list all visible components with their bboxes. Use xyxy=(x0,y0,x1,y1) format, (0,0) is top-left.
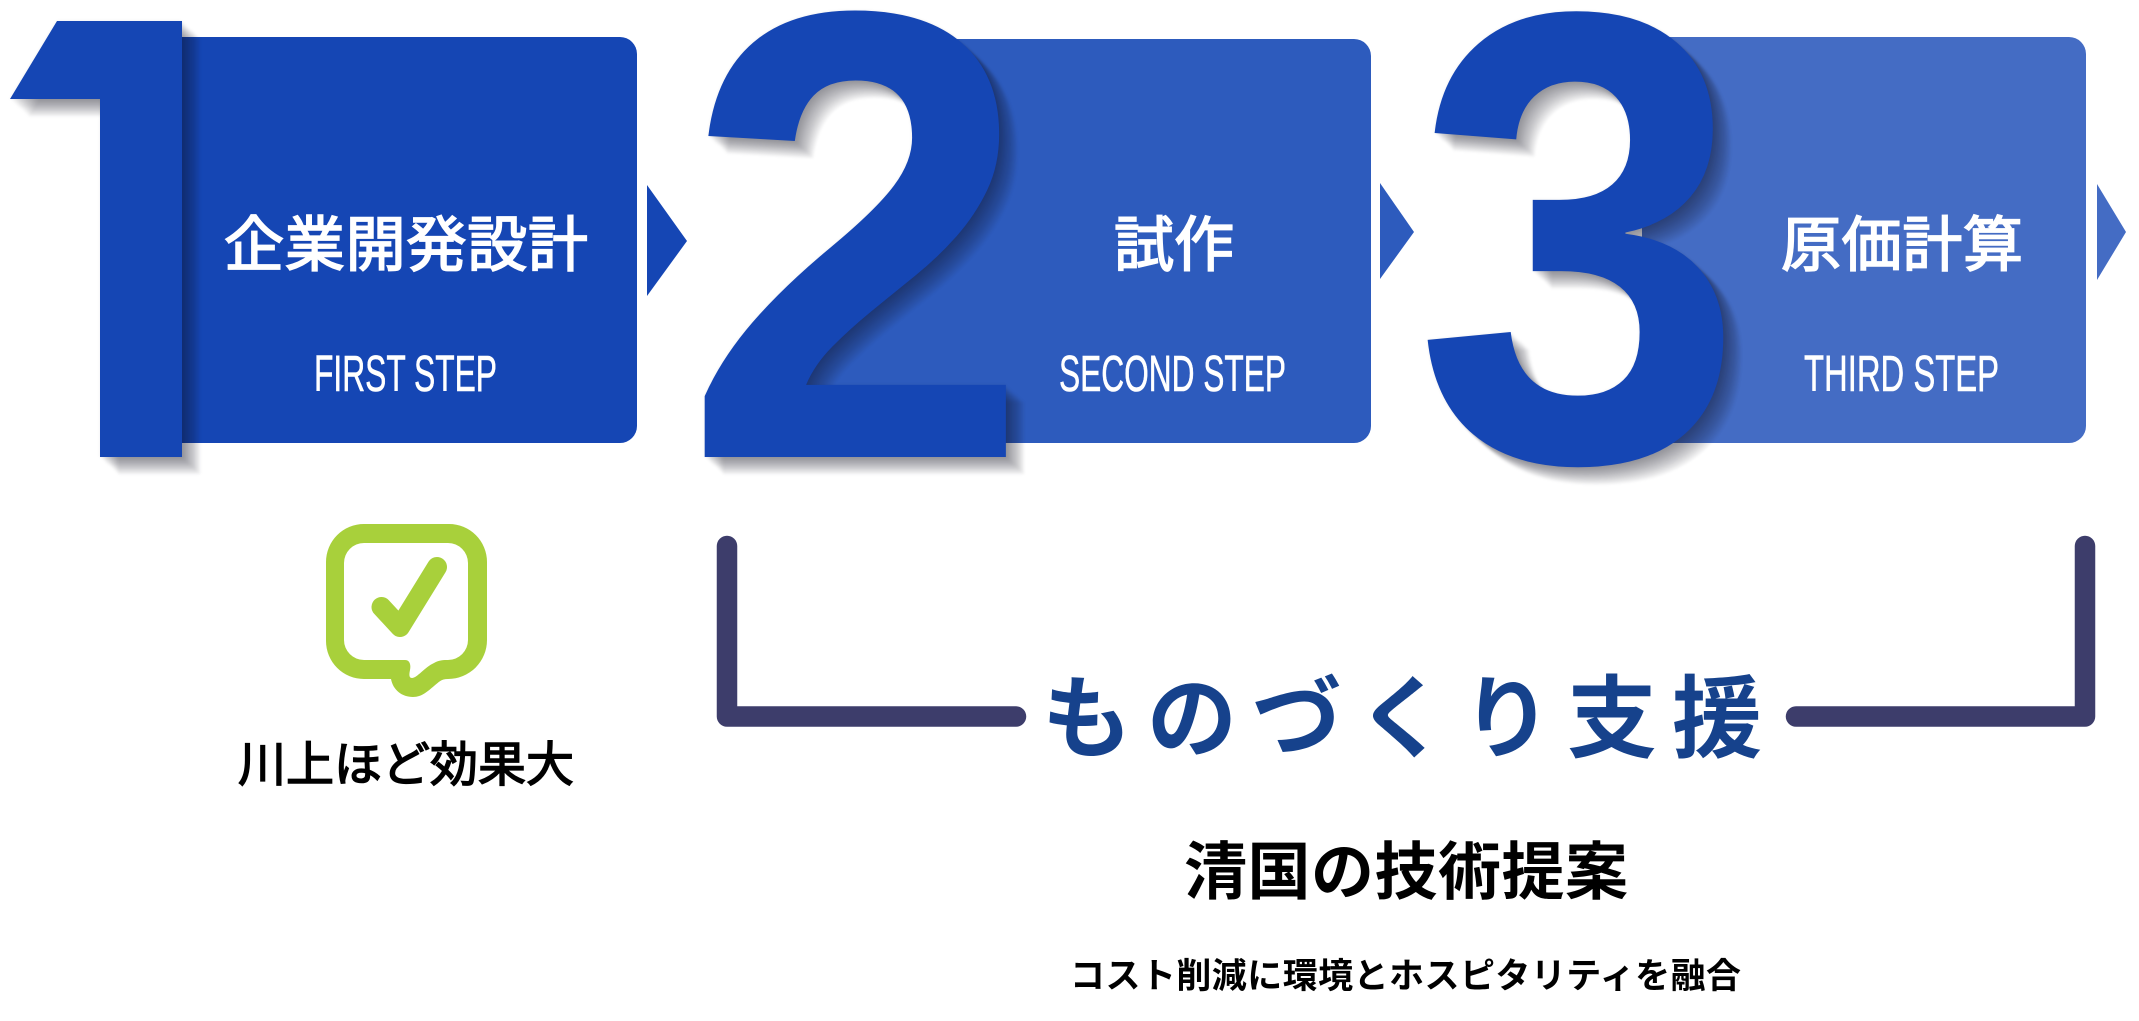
arrow 1 xyxy=(647,185,687,296)
caption: コスト削減に環境とホスピタリティを融合 xyxy=(1070,957,1741,996)
callout: upstream effect xyxy=(238,524,574,792)
card: third step xyxy=(1642,37,2086,443)
subheading: 清国の技術提案: 清国の技術提案 xyxy=(1184,838,1628,908)
heading: 試作: 試作 xyxy=(1114,212,1234,279)
panel: first step xyxy=(10,21,687,474)
icon: speech bubble with check xyxy=(326,524,487,697)
label: THIRD STEP: THIRD STEP xyxy=(1804,345,1999,402)
arrow 2 xyxy=(1380,183,1414,279)
text: 川上ほど効果大: 川上ほど効果大 xyxy=(238,739,574,792)
heading: 原価計算: 原価計算 xyxy=(1781,212,2023,279)
heading: 企業開発設計: 企業開発設計 xyxy=(224,212,588,279)
label: SECOND STEP: SECOND STEP xyxy=(1059,345,1286,402)
panel: third step xyxy=(1414,0,2126,597)
arrow 3 xyxy=(2097,184,2126,280)
bracket and support summary xyxy=(727,546,2085,996)
card: second step xyxy=(790,39,1371,443)
card: first step xyxy=(170,37,637,443)
panel: second step xyxy=(683,0,1414,593)
label: FIRST STEP: FIRST STEP xyxy=(314,345,497,402)
bracket right xyxy=(1796,546,2085,716)
bracket left xyxy=(727,546,1016,716)
heading: ものづくり支援: ものづくり支援 xyxy=(1042,670,1762,770)
